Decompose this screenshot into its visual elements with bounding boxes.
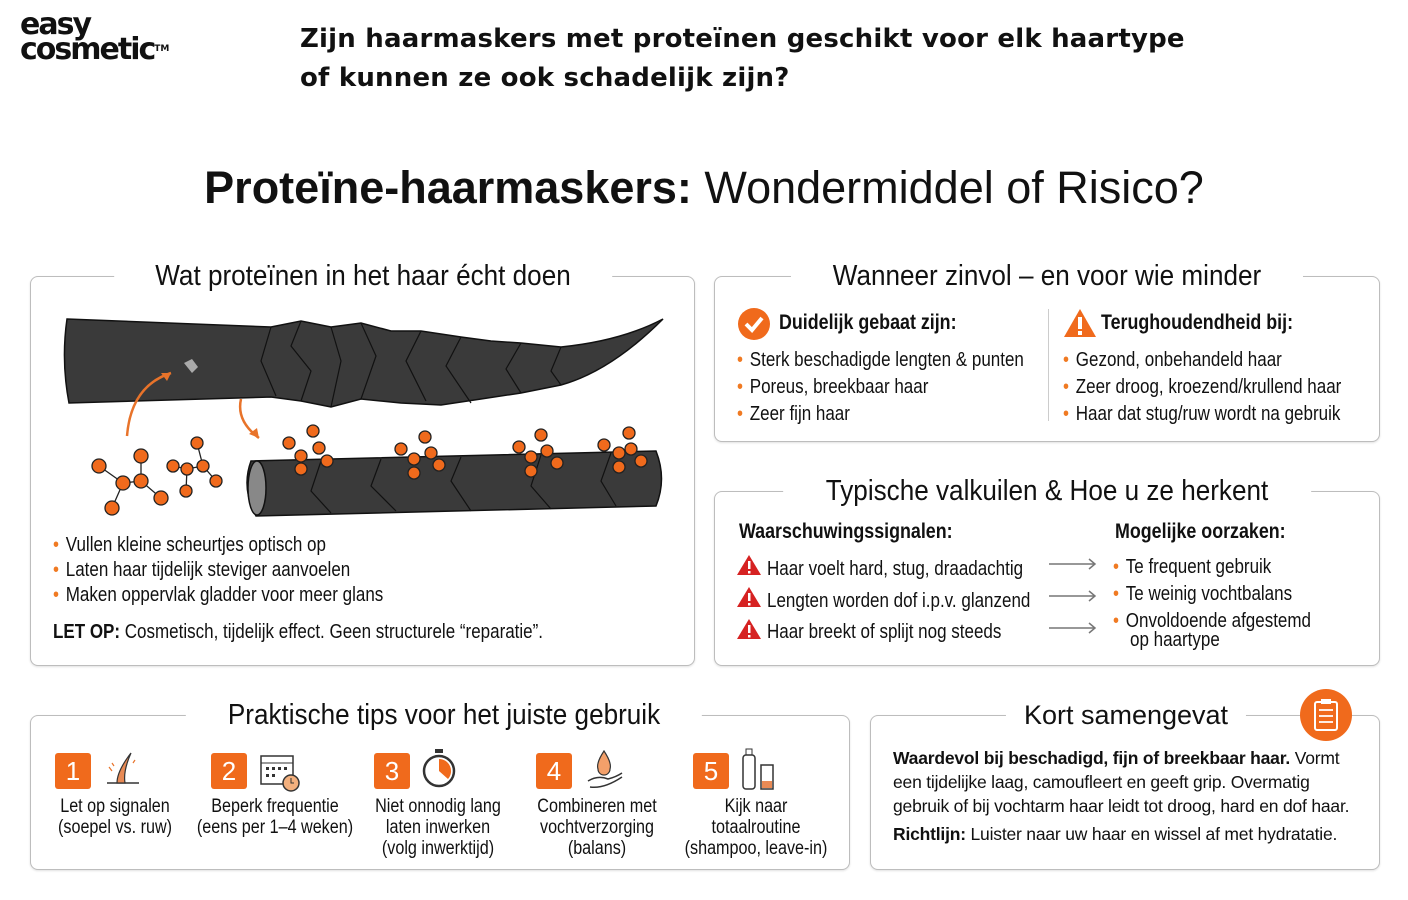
icon: clipboard (1300, 689, 1352, 741)
tip 1: 1 (66, 756, 80, 786)
tip 3: 3 (385, 756, 399, 786)
column: caution: • Zeer droog, kroezend/krullend haar (1063, 376, 1341, 398)
causes: • Te weinig vochtbalans (1113, 583, 1292, 605)
tip 4: 4 (547, 756, 561, 786)
summary text: gebruik of bij vochtarm haar leidt tot droog, hard en dof haar. (893, 796, 1349, 816)
tip 1 (55, 752, 139, 789)
panel: praktische tips: Combineren met (537, 796, 657, 817)
tip 3 (374, 749, 456, 789)
warning signals (737, 520, 1030, 643)
logo: easy (20, 7, 90, 42)
arrows (1049, 558, 1096, 634)
warning signals: Haar voelt hard, stug, draadachtig (767, 558, 1023, 580)
heading (1006, 696, 1246, 734)
column: caution: • Gezond, onbehandeld haar (1063, 349, 1282, 371)
icon: warning (1064, 309, 1096, 337)
causes: op haartype (1130, 629, 1220, 651)
illustration: hair (64, 318, 664, 517)
panel: praktische tips: totaalroutine (712, 817, 800, 838)
bullets: • Maken oppervlak gladder voor meer glans (53, 584, 383, 606)
column: suitable: • Zeer fijn haar (737, 403, 850, 425)
panel: praktische tips: laten inwerken (386, 817, 490, 838)
tip 4 (536, 750, 622, 789)
panel: praktische tips: Let op signalen (60, 796, 170, 817)
column: caution (1063, 309, 1341, 425)
column: suitable: • Poreus, breekbaar haar (737, 376, 928, 398)
column: suitable: • Sterk beschadigde lengten & punten (737, 349, 1024, 371)
panel: praktische tips: (shampoo, leave-in) (685, 838, 827, 859)
panel: praktische tips: (eens per 1–4 weken) (197, 817, 353, 838)
tip 5: 5 (704, 756, 718, 786)
logo: cosmeticTM (20, 32, 169, 67)
panel: valkuilen (714, 491, 1380, 666)
bullets (53, 534, 383, 606)
heading: Wanneer zinvol – en voor wie minder (833, 260, 1261, 292)
heading: Kort samengevat (1024, 700, 1228, 730)
causes: • Te frequent gebruik (1113, 556, 1271, 578)
column: caution: • Haar dat stug/ruw wordt na gebruik (1063, 403, 1340, 425)
panel: praktische tips: Kijk naar (725, 796, 787, 817)
tip 5 (693, 748, 774, 790)
causes (1113, 520, 1311, 651)
header question: of kunnen ze ook schadelijk zijn? (300, 63, 790, 93)
warning signals: Waarschuwingssignalen: (739, 520, 953, 543)
header question (300, 24, 1185, 93)
column: suitable: Duidelijk gebaat zijn: (779, 311, 957, 334)
warning signals: Haar breekt of splijt nog steeds (767, 621, 1001, 643)
panel: wat proteinen doen (30, 276, 695, 666)
heading: Typische valkuilen & Hoe u ze herkent (826, 475, 1268, 507)
panel: praktische tips (30, 715, 850, 870)
heading: Praktische tips voor het juiste gebruik (228, 699, 660, 731)
panel: praktische tips: Beperk frequentie (211, 796, 339, 817)
main title: Proteïne-haarmaskers: Wondermiddel of Risico? (204, 162, 1204, 213)
tip 2 (211, 753, 300, 792)
icon: check (738, 308, 770, 340)
causes: Mogelijke oorzaken: (1115, 520, 1286, 543)
panel: praktische tips: (volg inwerktijd) (382, 838, 494, 859)
note: LET OP: Cosmetisch, tijdelijk effect. Geen structurele “reparatie”. (53, 621, 543, 643)
panel: praktische tips: Niet onnodig lang (375, 796, 501, 817)
panel: praktische tips: (soepel vs. ruw) (58, 817, 172, 838)
logo (20, 7, 169, 67)
causes: • Onvoldoende afgestemd (1113, 610, 1311, 632)
panel: praktische tips: vochtverzorging (540, 817, 654, 838)
column: caution: Terughoudendheid bij: (1101, 311, 1293, 334)
header question: Zijn haarmaskers met proteïnen geschikt voor elk haartype (300, 24, 1185, 54)
panel: wanneer zinvol (714, 276, 1380, 442)
panel: praktische tips: (balans) (568, 838, 626, 859)
tip 2: 2 (222, 756, 236, 786)
panel: kort samengevat: Richtlijn: Luister naar uw haar en wissel af met hydratatie. (893, 824, 1337, 844)
bullets: • Vullen kleine scheurtjes optisch op (53, 534, 326, 556)
warning signals: Lengten worden dof i.p.v. glanzend (767, 590, 1030, 612)
column: suitable (737, 308, 1024, 425)
panel: kort samengevat (870, 715, 1380, 870)
summary text (893, 748, 1349, 816)
summary text: Waardevol bij beschadigd, fijn of breekbaar haar. Vormt (893, 748, 1339, 768)
bullets: • Laten haar tijdelijk steviger aanvoelen (53, 559, 350, 581)
heading: Wat proteïnen in het haar écht doen (155, 260, 571, 292)
summary text: een tijdelijke laag, camoufleert en geeft grip. Overmatig (893, 772, 1310, 792)
